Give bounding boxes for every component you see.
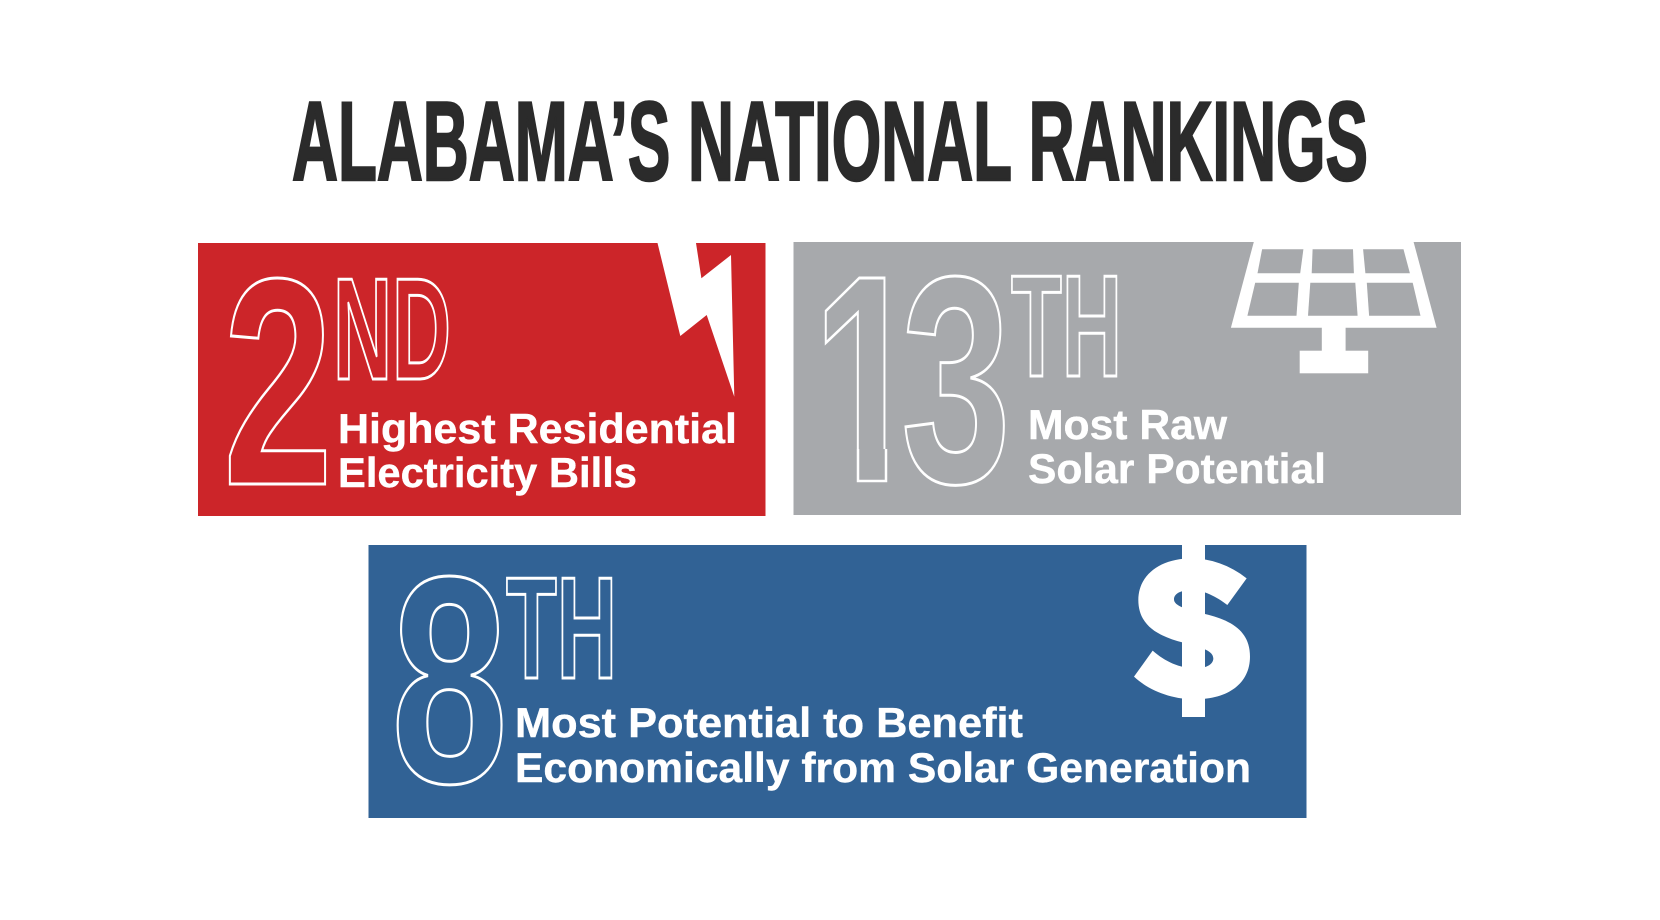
panel: 2nd highest residential electricity bills — [198, 217, 766, 547]
rank number 13: 1 — [812, 214, 920, 544]
gray panel background — [794, 242, 1461, 515]
rank suffix ND: ND — [333, 248, 451, 410]
panel: 8th most potential to benefit economically — [368, 515, 1306, 845]
red panel background — [198, 243, 766, 516]
icon: lightning bolt — [658, 243, 734, 397]
description: Solar Potential — [1028, 445, 1326, 492]
rank number 13: 3 — [901, 215, 1011, 545]
description: Economically from Solar Generation — [515, 744, 1251, 791]
icon: dollar sign — [1134, 545, 1250, 717]
description: Most Potential to Benefit — [515, 699, 1023, 746]
description: Electricity Bills — [338, 449, 637, 496]
description: Highest Residential — [338, 405, 737, 452]
description — [515, 699, 1251, 791]
panel: 13th most raw solar potential — [794, 242, 1461, 515]
rank number 2: 2 — [223, 217, 333, 547]
description: Most Raw — [1028, 401, 1227, 448]
description — [338, 405, 737, 496]
rank number 13 — [824, 274, 1005, 487]
description — [1028, 401, 1326, 492]
icon: solar panel — [1231, 242, 1437, 373]
blue panel background — [368, 545, 1306, 818]
rank suffix TH: TH — [1011, 245, 1122, 407]
rank suffix TH: TH — [506, 547, 617, 709]
rank number 8: 8 — [391, 515, 508, 845]
